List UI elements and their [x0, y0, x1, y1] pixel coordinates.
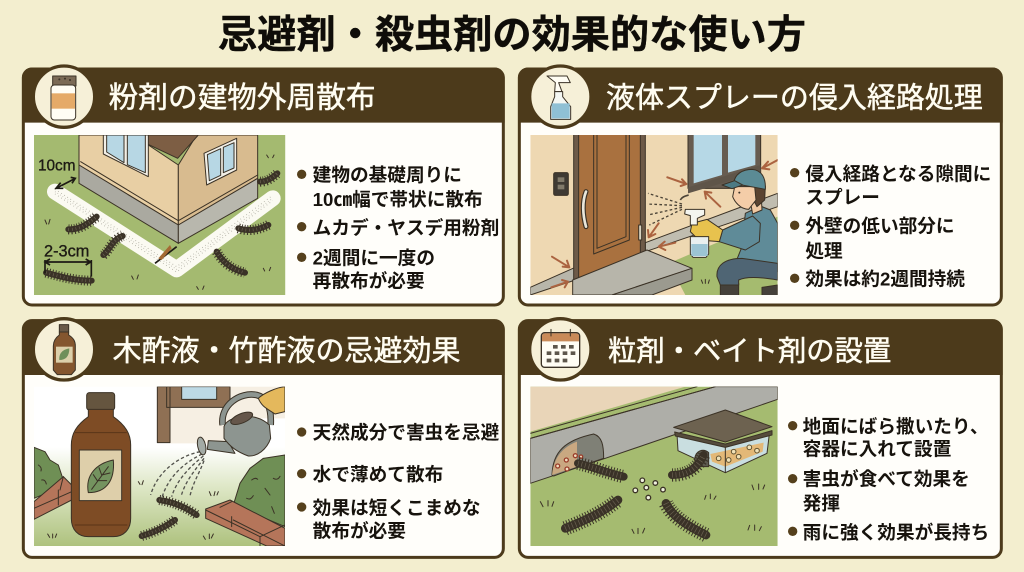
trousers: [717, 258, 778, 285]
wall and window: [170, 387, 285, 443]
bullet list: vinegar: [297, 422, 500, 541]
cap: [734, 169, 765, 189]
bullet list: powder: [297, 164, 499, 292]
bullet list: vinegar: 散布が必要: [313, 520, 406, 541]
bullet list: powder: 再散布が必要: [313, 271, 425, 292]
panel: powder perimeter: [22, 66, 505, 305]
bullet list: powder: 10㎝幅で帯状に散布: [313, 189, 483, 210]
panel header band: [22, 68, 505, 123]
pointer arrow at corner: [155, 247, 177, 263]
centipedes: [578, 463, 624, 477]
boots: [720, 283, 739, 297]
wall: [530, 387, 685, 432]
icon: vinegar bottle: [33, 319, 95, 380]
granules in gap: [556, 454, 583, 471]
illustration: person spraying entry points: [530, 133, 778, 297]
arrows: [551, 160, 778, 287]
panel: liquid spray: [518, 66, 1003, 305]
bullet list: vinegar: 効果は短くこまめな: [313, 497, 481, 518]
bullet list: spray: [790, 164, 991, 289]
bullet list: spray: スプレー: [805, 187, 880, 208]
bullet list: bait: 地面にばら撒いたり、: [803, 416, 988, 437]
bullet list: bait: 雨に強く効果が長持ち: [803, 522, 989, 543]
bullet list: spray: 侵入経路となる隙間に: [805, 164, 991, 185]
panel header band: [518, 319, 1003, 375]
bullet list: powder: 建物の基礎周りに: [313, 164, 462, 185]
bullet list: bait: [788, 416, 989, 543]
illustration: bottle and watering can: [34, 387, 285, 546]
foundation: [530, 387, 778, 483]
bullet list: powder: ムカデ・ヤスデ用粉剤: [313, 217, 499, 238]
torso: [732, 206, 778, 272]
bullet list: powder: 2週間に一度の: [313, 247, 435, 268]
heading: spray: 液体スプレーの侵入経路処理: [606, 82, 983, 115]
bullet list: bait: 容器に入れて設置: [803, 439, 951, 460]
large bottle: [71, 393, 131, 537]
worker: [685, 169, 778, 297]
neck, hair, face: [751, 202, 762, 214]
baseboard and ground: [530, 267, 575, 295]
bullet list: bait: 害虫が食べて効果を: [803, 469, 970, 490]
window: [688, 133, 761, 188]
bushes and bricks: [34, 447, 63, 498]
bullet list: spray: 処理: [805, 240, 843, 261]
glove: [690, 219, 723, 242]
heading: vinegar: 木酢液・竹酢液の忌避効果: [113, 334, 460, 367]
house: [79, 135, 178, 225]
illustration: house with powder band: 2-3cm: [44, 243, 89, 261]
heading: bait: 粒剤・ベイト剤の設置: [608, 335, 891, 367]
powder band: [55, 192, 273, 269]
spray water: [151, 452, 204, 498]
step: [573, 250, 692, 295]
bullet list: vinegar: 天然成分で害虫を忌避: [313, 422, 500, 443]
bullet list: spray: 外壁の低い部分に: [805, 215, 955, 236]
watering can: [196, 387, 285, 456]
door: [574, 133, 645, 280]
centipedes: [159, 500, 197, 515]
bullet list: spray: 効果は約2週間持続: [805, 268, 965, 289]
wall gap: [552, 434, 604, 476]
panel header band: [518, 68, 1003, 123]
intercom: [554, 173, 568, 195]
illustration: bait station: [530, 387, 778, 546]
bullet list: vinegar: 水で薄めて散布: [313, 464, 443, 485]
icon: powder shaker: [33, 66, 95, 127]
dimension labels: 10cm: [38, 158, 75, 175]
icon: calendar: [530, 319, 591, 380]
title: 忌避剤・殺虫剤の効果的な使い方: [218, 14, 806, 57]
arm: [719, 216, 760, 250]
bait box: [674, 410, 772, 473]
panel: wood vinegar: [22, 319, 505, 557]
panel header band: [22, 319, 505, 375]
heading: powder: 粉剤の建物外周散布: [109, 82, 376, 115]
spray mist: [647, 193, 682, 225]
bullet list: bait: 発揮: [803, 493, 840, 514]
spray bottle: [685, 209, 705, 225]
icon: spray bottle: [530, 66, 591, 127]
illustration: house with powder band: [34, 135, 285, 295]
scattered granules: [633, 478, 665, 500]
centipedes: [68, 217, 97, 229]
panel: granules and bait: [518, 319, 1003, 557]
